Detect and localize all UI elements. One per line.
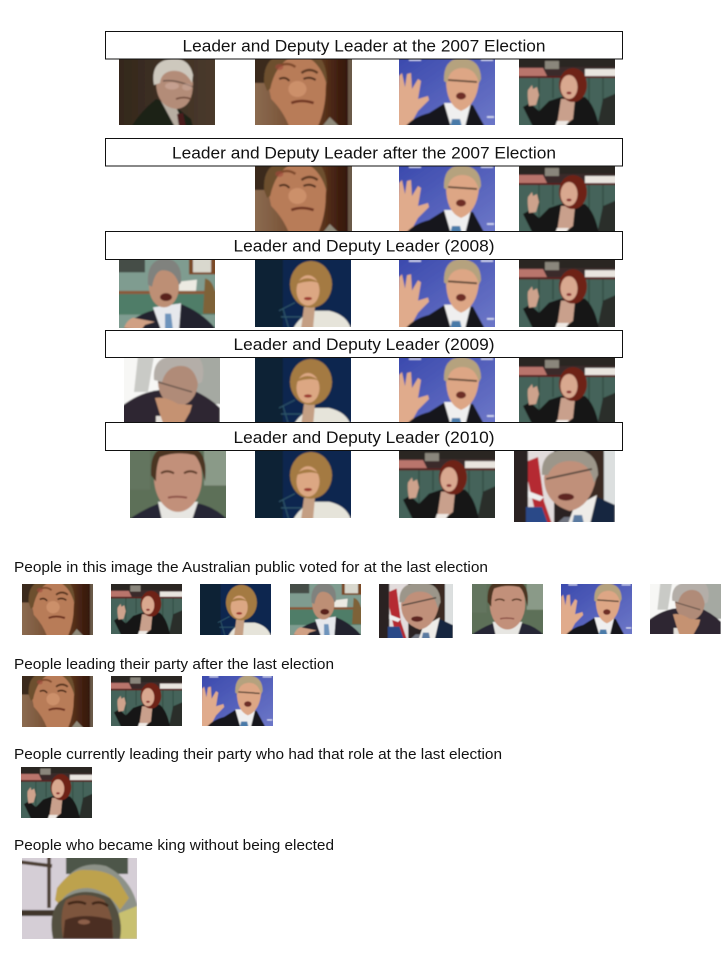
photo: Gillard: [110, 582, 183, 636]
heading: 2010: Leader and Deputy Leader (2010): [234, 428, 494, 447]
photo: Bishop: [199, 582, 272, 637]
photo: Gillard: [397, 449, 497, 520]
heading: after the 2007 election: [106, 138, 622, 166]
heading: 2010: [106, 422, 622, 450]
photo: Gillard: [110, 674, 183, 728]
photo: Gillard: [517, 356, 617, 426]
photo: Rudd: [397, 258, 497, 329]
photo: King Arthur: [20, 856, 139, 941]
photo: Rudd: [397, 164, 497, 234]
panel: after 2007 election row: [253, 164, 617, 234]
heading: at the 2007 election: [106, 32, 622, 59]
photo: Howard: [117, 57, 217, 127]
heading: 2009: [106, 330, 622, 358]
heading: 2008: [106, 232, 622, 260]
panel: people voted for: [21, 578, 722, 640]
photo: Costello: [21, 674, 94, 729]
photo: Bishop: [253, 356, 353, 426]
photo: Rudd: [201, 674, 274, 728]
photo: Abbott: [471, 578, 544, 636]
photo: Rudd: [397, 356, 497, 426]
panel: 2010 row: [128, 443, 616, 524]
photo: Turnbull: [122, 356, 222, 426]
photo: Bishop: [253, 258, 353, 329]
photo: Gillard: [517, 164, 617, 234]
panel: 2009 row: [122, 356, 617, 426]
photo: Costello: [21, 582, 94, 637]
heading: 2009: Leader and Deputy Leader (2009): [234, 335, 494, 354]
panel: 2007 election leaders row: [117, 57, 617, 127]
photo: Wayne Swan: [512, 449, 616, 524]
text: voted for label: People in this image the Australian public voted for at the last election: [14, 559, 488, 576]
photo: Turnbull: [649, 582, 722, 636]
photo: Rudd: [397, 57, 497, 127]
panel: 2008 row: [117, 258, 617, 330]
photo: Costello: [253, 164, 354, 234]
text: currently leading label: People currently leading their party who had that role at the last election: [14, 746, 502, 763]
photo: Bishop: [253, 449, 353, 520]
photo: Rudd: [560, 582, 633, 636]
photo: Nelson: [289, 582, 362, 637]
photo: Abbott: [128, 443, 228, 520]
photo: Gillard: [517, 258, 617, 329]
panel: people leading their party: [21, 674, 274, 729]
photo: Costello: [253, 57, 354, 127]
heading: 2008: Leader and Deputy Leader (2008): [234, 236, 494, 256]
text: leading party label: People leading their party after the last election: [14, 656, 334, 673]
photo: Wayne Swan: [378, 582, 454, 640]
photo: Nelson: [117, 258, 217, 330]
photo: Gillard: [20, 765, 93, 820]
heading: after the 2007 election: Leader and Deputy Leader after the 2007 Election: [172, 144, 556, 162]
photo: Gillard: [517, 57, 617, 127]
heading: at the 2007 election: Leader and Deputy Leader at the 2007 Election: [182, 36, 546, 56]
text: king label: People who became king without being elected: [14, 837, 334, 854]
